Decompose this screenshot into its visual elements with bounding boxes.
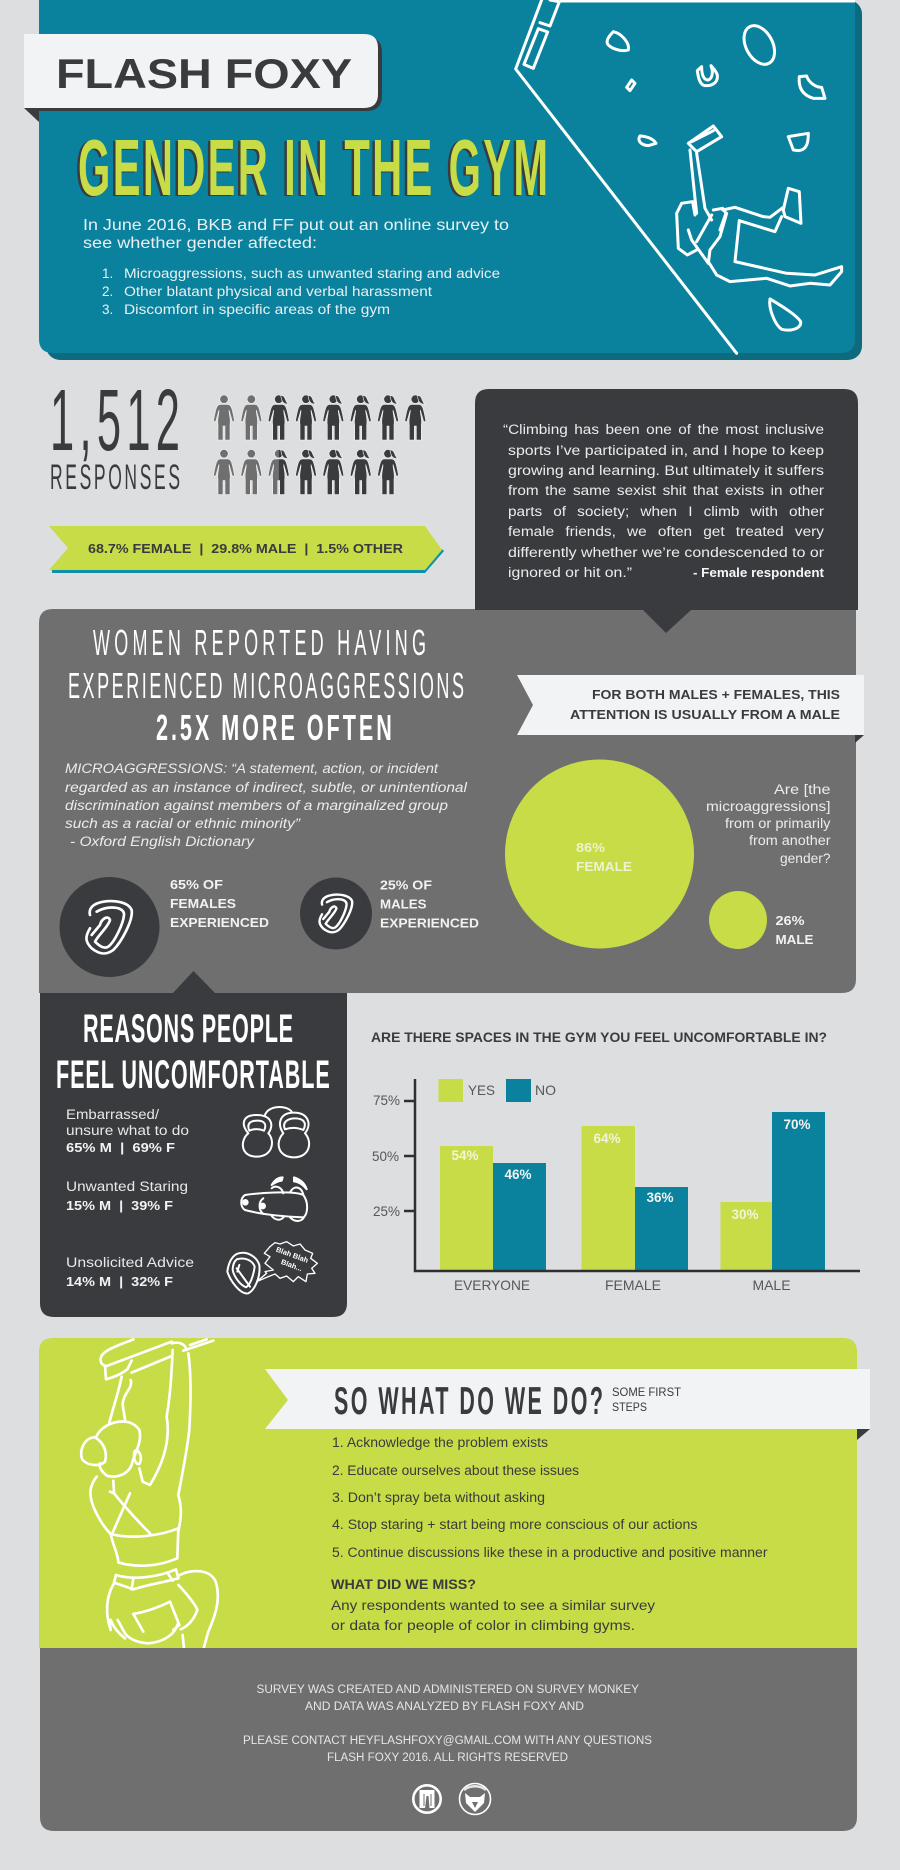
reason: embarrassed: 65% M | 69% F <box>66 1140 175 1155</box>
list: first steps: 4. Stop staring + start being more conscious of our actions <box>332 1517 698 1532</box>
bars: female: 64% <box>593 1131 621 1146</box>
text block: definition: - Oxford English Dictionary <box>70 834 255 849</box>
bars: male <box>720 1112 825 1270</box>
axis labels <box>372 1092 790 1293</box>
ribbon: attention from male: FOR BOTH MALES + FEMALES, THIS <box>592 687 840 702</box>
text block: respondent quote <box>503 422 825 580</box>
icon: carabiner small <box>300 878 372 950</box>
axes <box>404 1079 860 1271</box>
bars: female: 36% <box>646 1190 674 1205</box>
text block: survey question: gender? <box>780 851 830 866</box>
text block: survey topics list: 1. <box>102 266 113 281</box>
text block: what did we miss: or data for people of color in climbing gyms. <box>331 1618 635 1633</box>
axis labels: 75% <box>373 1092 400 1108</box>
text: 65% of females: FEMALES <box>170 897 236 911</box>
banner: Flash Foxy: FLASH FOXY <box>56 50 352 97</box>
panel: quote <box>475 389 858 633</box>
bubble: 26% male <box>709 891 814 949</box>
text block: respondent quote: - Female respondent <box>693 565 825 580</box>
text block: survey question: microaggressions] <box>706 799 830 814</box>
reason: unwanted staring: 15% M | 39% F <box>66 1198 173 1213</box>
ribbon: heading so what do we do <box>265 1369 870 1440</box>
text block: intro: see whether gender affected: <box>83 235 317 252</box>
title: Gender in the Gym: GENDER IN THE GYM <box>76 123 546 214</box>
text block: survey question <box>706 782 831 866</box>
text block: survey topics list: Microaggressions, such as unwanted staring and advice <box>124 266 500 281</box>
heading: reasons: FEEL UNCOMFORTABLE <box>56 1052 330 1097</box>
heading: reasons <box>56 1006 330 1097</box>
arrow ribbon: gender split: 68.7% FEMALE | 29.8% MALE | 1.5% OTHER <box>88 541 404 556</box>
text block: what did we miss: Any respondents wanted to see a similar survey <box>331 1598 655 1613</box>
text block: survey topics list <box>102 266 500 317</box>
icon: Flash Foxy logo <box>460 1784 490 1814</box>
bar chart: uncomfortable spaces <box>372 1079 860 1293</box>
icon: climbing wall and climber line art <box>516 0 842 353</box>
text block: survey topics list: 2. <box>102 284 113 299</box>
legend: YES <box>468 1082 495 1098</box>
heading: reasons: REASONS PEOPLE <box>83 1006 293 1051</box>
text block: intro <box>83 217 509 252</box>
text block: definition: regarded as an instance of indirect, subtle, or unintentional <box>65 780 468 795</box>
bars: everyone: 54% <box>451 1148 479 1163</box>
icon: staring eyes <box>241 1177 307 1221</box>
legend: NO <box>535 1082 556 1098</box>
text block: credits <box>243 1684 652 1764</box>
chart: people pictogram <box>214 395 426 494</box>
ribbon: heading so what do we do: SO WHAT DO WE DO? <box>334 1379 603 1423</box>
axis labels: FEMALE <box>605 1277 661 1293</box>
reason: embarrassed <box>66 1107 189 1155</box>
text block: credits: PLEASE CONTACT HEYFLASHFOXY@GMAIL.COM WITH ANY QUESTIONS <box>243 1735 652 1747</box>
arrow ribbon: gender split <box>49 526 444 573</box>
stat: 1,512 responses: 1,512 <box>50 372 180 469</box>
text: 65% of females: 65% OF <box>170 878 223 892</box>
bars: everyone <box>440 1146 546 1270</box>
icon: talking mouth with Blah Blah speech burst: Blah... <box>280 1257 304 1273</box>
text block: survey question: from another <box>749 833 831 848</box>
ribbon: attention from male <box>517 675 864 743</box>
text block: survey question: from or primarily <box>725 816 831 831</box>
text block: respondent quote: growing and learning. But ultimately it suffers <box>508 463 824 478</box>
text block: respondent quote: parts of society; when I climb with other <box>508 504 825 519</box>
ribbon: heading so what do we do: STEPS <box>612 1402 647 1414</box>
list: first steps: 3. Don’t spray beta without asking <box>332 1490 545 1505</box>
reason: unsolicited advice: Unsolicited Advice <box>66 1255 194 1270</box>
text block: survey question: Are [the <box>774 782 830 797</box>
text: 65% of females <box>170 878 269 930</box>
stat: 1,512 responses: RESPONSES <box>50 457 180 497</box>
text block: respondent quote: differently whether we’re condescended to or <box>508 545 825 560</box>
text block: credits: AND DATA WAS ANALYZED BY FLASH FOXY AND <box>305 1701 584 1713</box>
banner: Flash Foxy <box>24 34 382 122</box>
icon: talking mouth with Blah Blah speech burst: Blah Blah <box>275 1245 310 1265</box>
bars: everyone: 46% <box>504 1167 532 1182</box>
reason: embarrassed: Embarrassed/ <box>66 1107 159 1122</box>
icon: carabiner large <box>60 877 160 977</box>
icon: BKB logo <box>413 1785 441 1813</box>
text block: credits: FLASH FOXY 2016. ALL RIGHTS RESERVED <box>327 1752 568 1764</box>
text: 65% of females: EXPERIENCED <box>170 916 269 930</box>
panel: reasons people feel uncomfortable <box>40 971 347 1317</box>
text block: what did we miss: WHAT DID WE MISS? <box>331 1577 476 1592</box>
icon: talking mouth with Blah Blah speech burst <box>227 1242 317 1293</box>
axis labels: 25% <box>373 1203 400 1219</box>
bubble: 26% male: MALE <box>776 932 814 947</box>
bars: male: 70% <box>783 1117 811 1132</box>
reason: unwanted staring <box>66 1179 188 1213</box>
title: Gender in the Gym: GENDER IN THE GYM <box>78 122 548 213</box>
text block: respondent quote: female friends, we often get treated very <box>508 524 824 539</box>
text block: survey topics list: 3. <box>102 302 113 317</box>
text block: respondent quote: “Climbing has been one of the most inclusive <box>503 422 824 437</box>
bars: male: 30% <box>731 1207 759 1222</box>
axis labels: EVERYONE <box>454 1277 530 1293</box>
list: first steps: 2. Educate ourselves about these issues <box>332 1463 579 1478</box>
text block: respondent quote: from the same sexist shit that exists in other <box>508 483 825 498</box>
text: 25% of males: EXPERIENCED <box>380 916 479 930</box>
heading: women reported: 2.5X MORE OFTEN <box>156 708 392 748</box>
text block: what did we miss <box>331 1577 655 1633</box>
axis labels: MALE <box>752 1277 790 1293</box>
panel: microaggressions <box>39 609 864 993</box>
bubble: 26% male: 26% <box>776 913 805 928</box>
bubble: 86% female <box>505 760 694 948</box>
icon: kettlebells <box>243 1107 309 1157</box>
text: 25% of males: MALES <box>380 898 426 912</box>
text block: intro: In June 2016, BKB and FF put out an online survey to <box>83 217 509 234</box>
text block: definition <box>65 761 468 849</box>
text block: respondent quote: sports I’ve participated in, and I hope to keep <box>508 443 824 458</box>
text block: survey topics list: Discomfort in specific areas of the gym <box>124 302 390 317</box>
text block: survey topics list: Other blatant physical and verbal harassment <box>124 284 432 299</box>
text block: respondent quote: ignored or hit on.” <box>508 565 632 580</box>
panel: hero header <box>24 0 862 360</box>
text: 25% of males <box>380 878 479 930</box>
bubble: 86% female: FEMALE <box>576 859 632 874</box>
axis labels: 50% <box>372 1148 399 1164</box>
bubble: 86% female: 86% <box>576 840 605 855</box>
ribbon: heading so what do we do: SOME FIRST <box>612 1387 681 1399</box>
illustration: climber hanging from hangboard <box>81 1339 218 1648</box>
heading: women reported <box>68 623 464 748</box>
heading: women reported: EXPERIENCED MICROAGGRESSIONS <box>68 666 464 707</box>
text block: definition: MICROAGGRESSIONS: “A statement, action, or incident <box>65 761 439 776</box>
reason: embarrassed: unsure what to do <box>66 1123 189 1138</box>
panel: footer <box>40 1648 857 1831</box>
reason: unwanted staring: Unwanted Staring <box>66 1179 188 1194</box>
list: first steps: 1. Acknowledge the problem exists <box>332 1435 548 1450</box>
text: 25% of males: 25% OF <box>380 878 432 892</box>
list: first steps: 5. Continue discussions like these in a productive and positive manner <box>332 1545 768 1560</box>
heading: chart question: ARE THERE SPACES IN THE GYM YOU FEEL UNCOMFORTABLE IN? <box>371 1030 827 1045</box>
text block: definition: such as a racial or ethnic minority” <box>65 816 301 831</box>
ribbon: attention from male: ATTENTION IS USUALLY FROM A MALE <box>570 707 840 722</box>
list: first steps <box>332 1435 768 1560</box>
legend <box>438 1079 556 1102</box>
text block: credits: SURVEY WAS CREATED AND ADMINISTERED ON SURVEY MONKEY <box>256 1684 639 1696</box>
text block: definition: discrimination against members of a marginalized group <box>65 798 449 813</box>
bars: female <box>582 1126 688 1270</box>
heading: women reported: WOMEN REPORTED HAVING <box>93 623 426 664</box>
reason: unsolicited advice: 14% M | 32% F <box>66 1274 173 1289</box>
reason: unsolicited advice <box>66 1255 194 1289</box>
panel: so what do we do <box>39 1338 870 1648</box>
